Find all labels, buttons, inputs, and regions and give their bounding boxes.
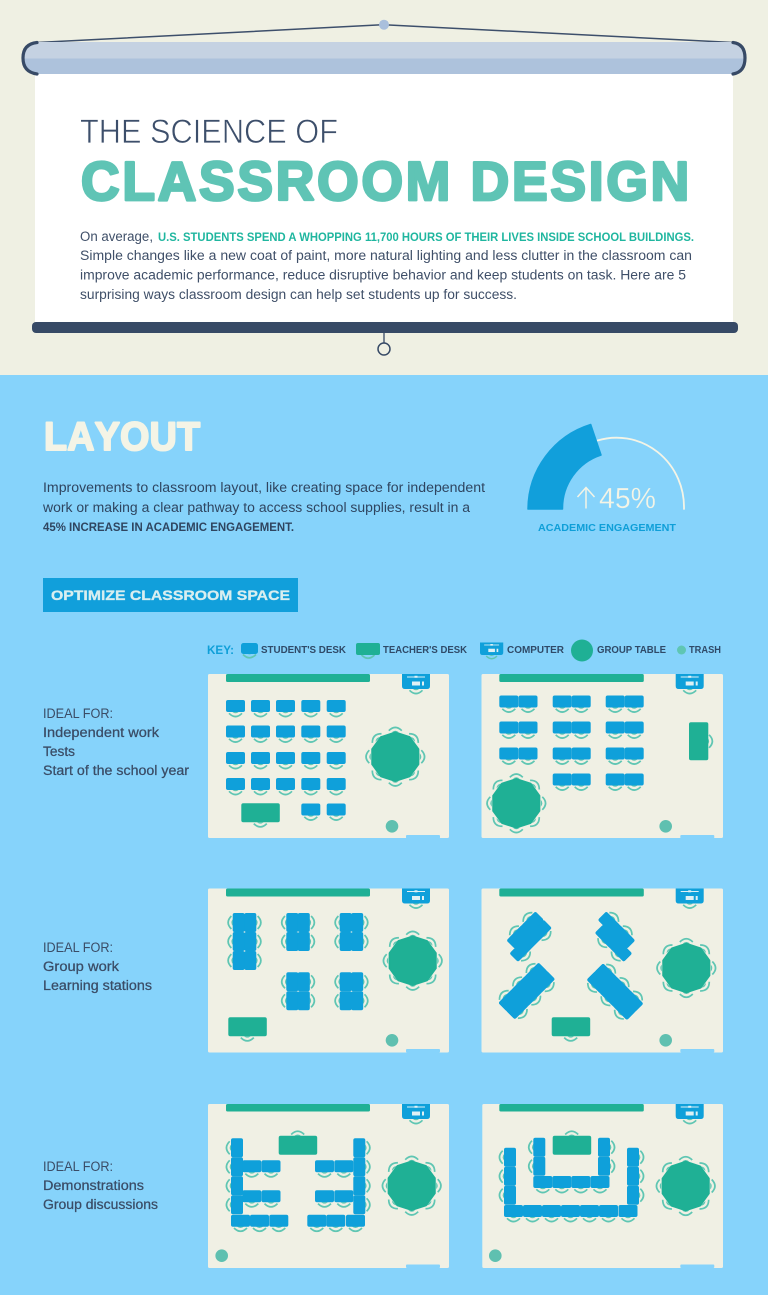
title line two: CLASSROOM DESIGN [81, 151, 689, 212]
ideal for: row two: Learning stations [43, 978, 152, 993]
floor plan: desk clusters [208, 888, 449, 1052]
key: trash [677, 645, 721, 656]
banner: optimize classroom space [43, 578, 298, 612]
ideal for: row one: Start of the school year [43, 763, 190, 778]
title line one: THE SCIENCE OF [80, 113, 338, 151]
gauge remainder arc [598, 438, 684, 509]
intro paragraph: On average, [80, 229, 153, 244]
intro paragraph [80, 229, 694, 302]
roller [20, 42, 750, 74]
layout paragraph: work or making a clear pathway to access school supplies, result in a [42, 500, 470, 515]
key [207, 640, 721, 662]
intro paragraph: U.S. STUDENTS SPEND A WHOPPING 11,700 HOURS OF THEIR LIVES INSIDE SCHOOL BUILDINGS. [158, 230, 694, 244]
key: group table [571, 640, 666, 662]
pull cord [378, 333, 390, 355]
key: teacher's desk [356, 643, 468, 658]
intro paragraph: improve academic performance, reduce disruptive behavior and keep students on task. Here are 5 [80, 268, 686, 282]
key: computer: COMPUTER [507, 645, 565, 656]
banner: optimize classroom space: OPTIMIZE CLASSROOM SPACE [51, 587, 290, 603]
key: student's desk [241, 643, 347, 658]
gauge filled arc [528, 424, 601, 509]
hanging string [37, 25, 733, 42]
projector screen [20, 20, 750, 355]
icon: up arrow [578, 488, 594, 508]
background: layout section [0, 375, 768, 1295]
ideal for: row two: IDEAL FOR: [43, 940, 113, 955]
ideal for: row three: Demonstrations [43, 1178, 144, 1193]
white screen [35, 74, 733, 322]
intro paragraph: surprising ways classroom design can help set students up for success. [80, 287, 517, 302]
floor plan: double horseshoe [482, 1104, 723, 1268]
floor plan: split horseshoe [208, 1104, 449, 1268]
bottom bar [32, 322, 738, 333]
background: wall [0, 0, 768, 375]
ideal for: row three: Group discussions [43, 1197, 158, 1212]
ideal for: row three: IDEAL FOR: [43, 1159, 113, 1174]
heading: layout: LAYOUT [44, 415, 200, 459]
key: group table: GROUP TABLE [597, 645, 666, 656]
ideal for: row three [43, 1159, 158, 1212]
ideal for: row one: IDEAL FOR: [43, 706, 113, 721]
ideal for: row two: Group work [43, 959, 119, 974]
gauge label: ACADEMIC ENGAGEMENT [538, 522, 677, 534]
layout paragraph: Improvements to classroom layout, like creating space for independent [43, 480, 485, 495]
ideal for: row one: Independent work [43, 725, 159, 740]
layout paragraph [42, 480, 485, 534]
gauge: academic engagement [528, 424, 684, 534]
hanging knob [379, 20, 389, 30]
floor plan: angled clusters [482, 888, 723, 1052]
key: computer [480, 642, 565, 659]
key: trash: TRASH [689, 645, 721, 656]
gauge value: 45% [599, 483, 656, 515]
floor plan: rows of desks [208, 674, 449, 838]
ideal for: row one [43, 706, 190, 778]
ideal for: row one: Tests [43, 744, 75, 759]
intro paragraph: Simple changes like a new coat of paint, more natural lighting and less clutter in the classroom can [80, 248, 692, 263]
key label: KEY: [207, 643, 234, 657]
layout paragraph: 45% INCREASE IN ACADEMIC ENGAGEMENT. [43, 522, 294, 534]
key: student's desk: STUDENT'S DESK [261, 645, 347, 656]
floor plan: paired rows [482, 674, 723, 838]
ideal for: row two [43, 940, 152, 993]
key: teacher's desk: TEACHER'S DESK [383, 645, 468, 656]
